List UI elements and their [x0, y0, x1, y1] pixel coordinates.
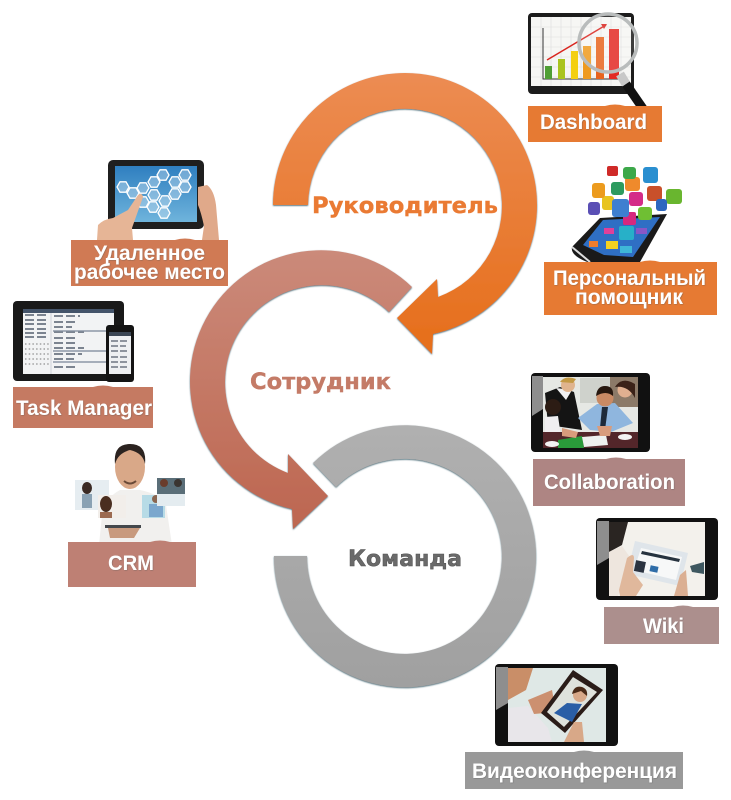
label: Wiki: Wiki — [643, 615, 684, 638]
icon: tablet with reading photo — [596, 518, 718, 600]
label: Видеоконференция — [465, 750, 683, 789]
panel: Удаленное рабочее место — [71, 160, 228, 286]
panel: Task Manager — [13, 301, 153, 428]
icon: tablet and phone with task lists — [13, 301, 134, 382]
label: Персональный помощник: помощник — [575, 286, 683, 309]
label: Task Manager: Task Manager — [16, 397, 152, 420]
label: Collaboration — [533, 458, 685, 506]
panel: Персональный помощник — [544, 166, 717, 315]
arrow: pink ring — [190, 250, 412, 529]
heading: Сотрудник: Сотрудник — [250, 370, 391, 395]
icon: tablet with team photo — [531, 373, 650, 452]
label: CRM — [68, 540, 196, 587]
icon: smartphone with app icons — [572, 166, 682, 263]
icon: man with tablet and floating photos — [75, 444, 185, 545]
arrow: orange ring — [273, 73, 537, 354]
icon: tablet with bar chart and magnifier — [528, 13, 644, 110]
icon: tablet with video call photo — [495, 664, 618, 746]
panel: Видеоконференция — [465, 664, 683, 789]
label: Dashboard: Dashboard — [540, 111, 647, 134]
label: Удаленное рабочее место: Удаленное — [94, 242, 205, 265]
label: Удаленное рабочее место — [71, 238, 228, 286]
label: Collaboration: Collaboration — [544, 471, 675, 494]
label: Видеоконференция: Видеоконференция — [472, 760, 677, 783]
panel: CRM — [68, 444, 196, 587]
panel: Collaboration — [531, 373, 685, 506]
panel: Dashboard — [528, 13, 662, 142]
panel: Wiki — [596, 518, 719, 644]
arrow: gray ring — [274, 425, 536, 687]
label: Персональный помощник — [544, 260, 717, 315]
label: Персональный помощник: Персональный — [553, 267, 706, 290]
label: Удаленное рабочее место: рабочее место — [74, 261, 225, 284]
heading: Руководитель: Руководитель — [312, 194, 498, 219]
icon: tablet held in hands — [97, 160, 219, 240]
label: CRM: CRM — [108, 552, 154, 575]
heading: Команда: Команда — [348, 547, 462, 572]
